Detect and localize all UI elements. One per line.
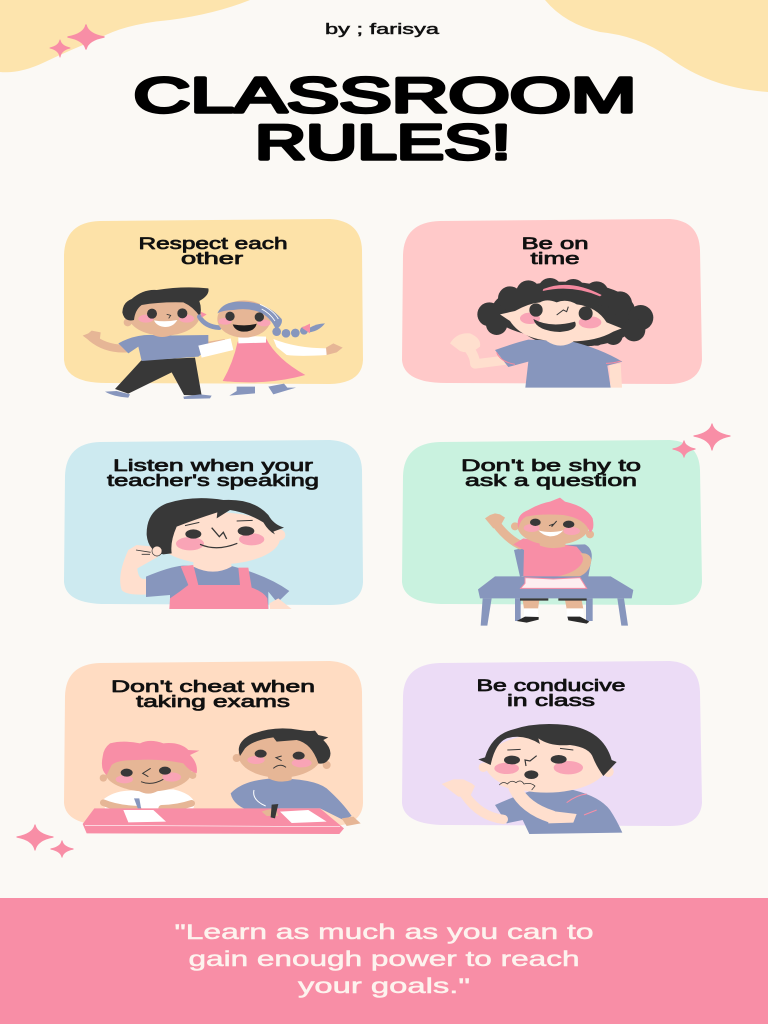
card label: ask a question	[465, 471, 637, 490]
card label: Don't cheat when	[111, 677, 315, 696]
card label	[522, 234, 588, 268]
quote text: your goals."	[298, 975, 470, 998]
card label	[111, 677, 315, 711]
top right blob	[545, 0, 768, 92]
card background	[402, 219, 702, 384]
card background	[64, 661, 363, 826]
card background	[402, 661, 702, 826]
card label: Don't be shy to	[461, 456, 641, 475]
card label: in class	[507, 691, 595, 710]
panel: be conducive in class	[402, 661, 702, 834]
card background	[402, 440, 702, 605]
card label: time	[530, 249, 580, 268]
card label: taking exams	[136, 692, 290, 711]
sparkle pair	[17, 825, 73, 857]
card label	[138, 234, 288, 268]
card label: other	[181, 249, 244, 268]
panel: listen when your teacher's speaking	[64, 440, 363, 609]
sparkle pair	[673, 424, 730, 457]
title: RULES!	[255, 116, 511, 170]
illustration: curly haired girl	[450, 278, 653, 388]
card label: Listen when your	[113, 456, 314, 475]
title	[134, 69, 636, 170]
top left blob	[0, 0, 250, 72]
quote text: gain enough power to reach	[188, 948, 580, 971]
panel: respect each other	[64, 219, 363, 399]
illustration: child touching hair	[120, 498, 292, 609]
quote text	[174, 921, 594, 998]
illustration: child covering mouth	[442, 724, 622, 834]
panel: don't be shy to ask a question	[402, 424, 730, 626]
card label	[461, 456, 641, 490]
title: CLASSROOM	[134, 69, 636, 123]
card label	[476, 676, 626, 710]
card label: Respect each	[138, 234, 288, 253]
sparkle pair top left	[50, 25, 104, 57]
panel: be on time	[402, 219, 702, 388]
card label: Be on	[522, 234, 588, 253]
illustration: child raising hand at desk	[478, 498, 633, 626]
quote banner	[0, 898, 768, 1024]
illustration: boy and girl	[83, 287, 343, 399]
banner background	[0, 898, 768, 1024]
quote text: "Learn as much as you can to	[174, 921, 594, 944]
card label: teacher's speaking	[107, 471, 319, 490]
card label: Be conducive	[476, 676, 626, 695]
byline: by ; farisya	[325, 21, 440, 38]
illustration: two pupils at desk	[83, 728, 361, 834]
face with fringe line	[500, 300, 622, 341]
curly hair mass	[477, 278, 653, 347]
panel: don't cheat when taking exams	[17, 661, 363, 857]
card background	[64, 219, 363, 384]
card background	[64, 440, 363, 605]
card label	[107, 456, 319, 490]
